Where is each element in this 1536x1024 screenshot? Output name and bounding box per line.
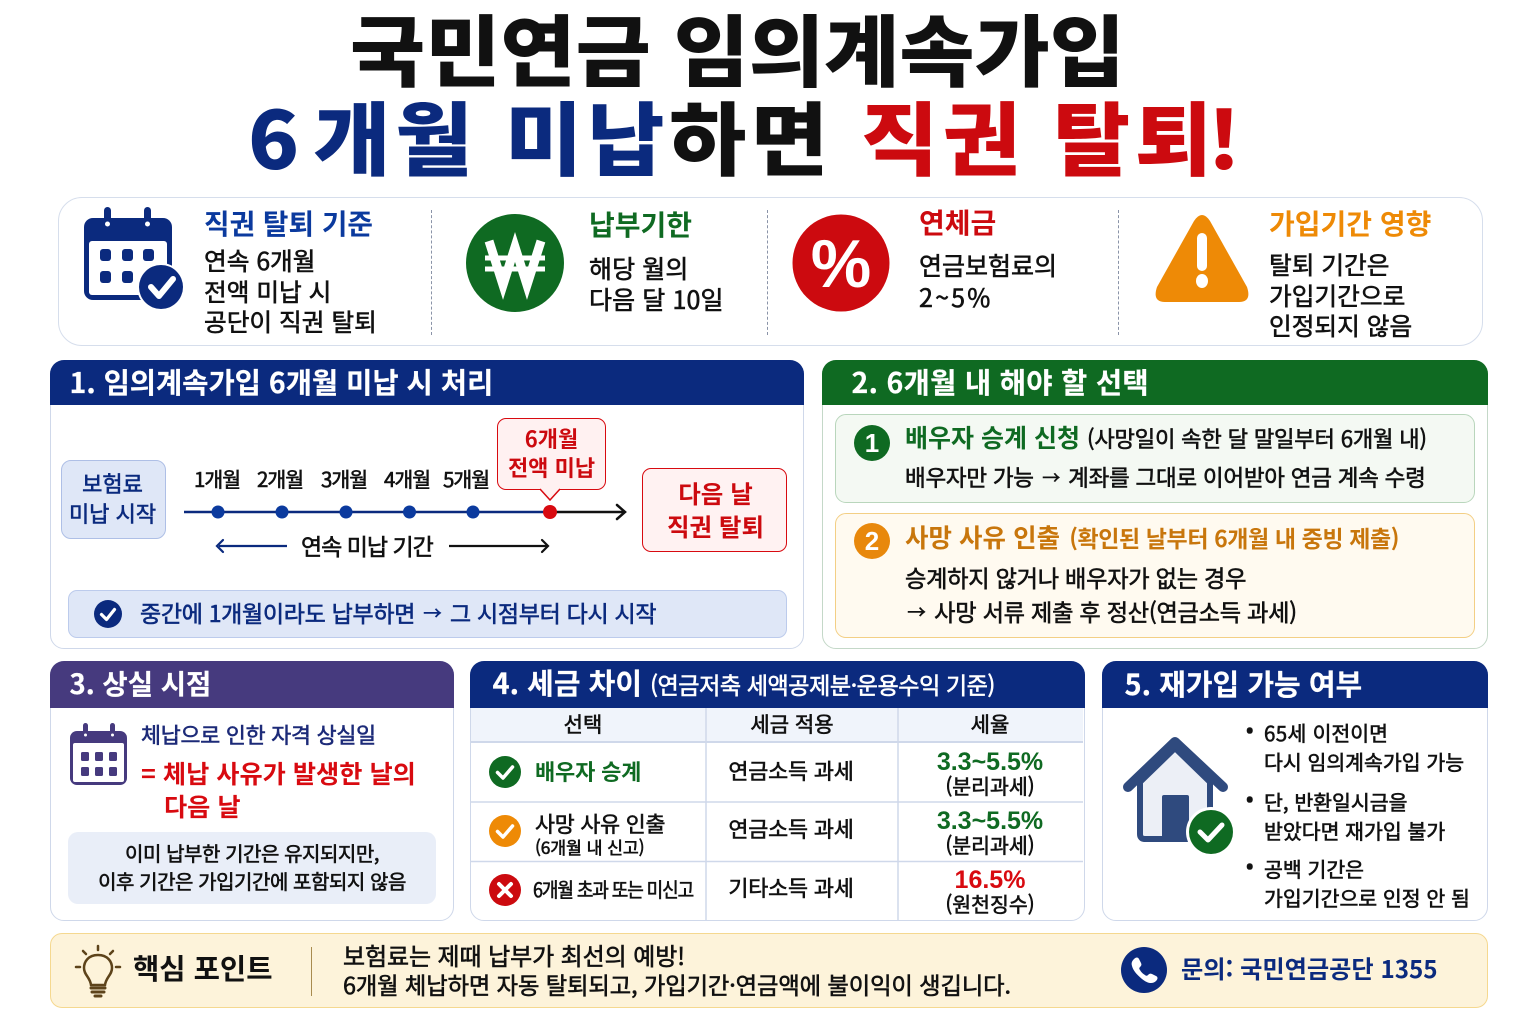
number badge — [854, 425, 890, 461]
heading: 직권 탈퇴 기준 — [204, 202, 373, 242]
text: late fee — [919, 202, 1057, 315]
contact text: 문의: 국민연금공단 1355 — [1181, 950, 1438, 985]
rate note: (분리과세) — [945, 770, 1035, 800]
icon: house check — [1123, 737, 1233, 854]
body: 공단이 직권 탈퇴 — [204, 303, 377, 339]
number badge — [854, 523, 890, 559]
icon: check — [94, 600, 122, 628]
heading: 연체금 — [919, 202, 996, 242]
bullet 3: 공백 기간은 — [1264, 853, 1364, 883]
loss date text: 체납으로 인한 자격 상실일 — [141, 719, 376, 750]
bullet 1: 다시 임의계속가입 가능 — [1264, 746, 1464, 776]
table grid — [471, 708, 1083, 920]
body: 해당 월의 — [589, 250, 689, 286]
bullet 3 — [1246, 854, 1481, 914]
table header row — [471, 708, 1083, 743]
note text: 이후 기간은 가입기간에 포함되지 않음 — [98, 866, 406, 894]
icon: phone — [1121, 947, 1167, 993]
header — [470, 660, 1085, 708]
body: 연속 6개월 — [204, 242, 315, 278]
note text — [98, 838, 406, 894]
note text: → — [423, 598, 442, 626]
note text: 이미 납부한 기간은 유지되지만, — [125, 838, 379, 866]
key message — [343, 941, 1023, 1005]
bullet 2: 받았다면 재가입 불가 — [1264, 814, 1445, 844]
callout text: 전액 미납 — [508, 451, 595, 483]
option title: 사망 사유 인출 (확인된 날부터 6개월 내 중빙 제출) — [905, 518, 1399, 555]
box text — [667, 476, 764, 544]
option text: 승계하지 않거나 배우자가 없는 경우 — [905, 560, 1246, 594]
panel 3: loss date — [50, 661, 454, 921]
column 2: 세금 적용 — [750, 709, 834, 739]
panel: key facts — [58, 197, 1483, 346]
divider 1 — [431, 210, 432, 335]
bullet 2: • — [1246, 781, 1253, 813]
bullet 1 — [1246, 718, 1481, 778]
option text: → — [907, 597, 926, 625]
column 3: 세율 — [971, 709, 1009, 739]
icon: orange check — [489, 815, 521, 847]
label: period: 연속 미납 기간 — [301, 528, 433, 562]
box text: 미납 시작 — [69, 497, 156, 529]
red statement — [141, 754, 416, 824]
panel: key point — [50, 933, 1488, 1008]
bullet 3: • — [1246, 848, 1253, 880]
choice note: (6개월 내 신고) — [535, 834, 644, 859]
tax: 연금소득 과세 — [728, 813, 854, 844]
icon: warning triangle — [1156, 215, 1248, 302]
box text: 다음 날 — [678, 476, 753, 511]
body: 전액 미납 시 — [204, 272, 331, 308]
header text: 1. 임의계속가입 6개월 미납 시 처리 — [70, 360, 493, 402]
body: 2~5% — [919, 279, 992, 315]
title — [248, 0, 1245, 193]
icon: light bulb — [75, 946, 121, 998]
option title: 배우자 승계 신청 (사망일이 속한 달 말일부터 6개월 내) — [905, 419, 1427, 455]
icon: red x — [489, 874, 521, 906]
line 1: 보험료는 제때 납부가 최선의 예방! — [343, 937, 685, 972]
rate note: (원천징수) — [945, 888, 1035, 918]
option 1 — [835, 414, 1475, 503]
divider — [311, 947, 312, 996]
callout text — [508, 422, 595, 483]
header text: 3. 상실 시점 — [70, 662, 211, 702]
icon: calendar — [70, 723, 127, 785]
option text: 배우자만 가능 계좌를 그대로 이어받아 연금 계속 수령 — [905, 461, 1426, 493]
body — [204, 242, 377, 339]
row: spouse succession — [489, 748, 1043, 800]
bullet 1: • — [1246, 712, 1253, 744]
header — [822, 360, 1488, 404]
number badge: 1 — [865, 428, 879, 458]
row: death withdrawal — [489, 807, 1043, 859]
icon: percent: % — [811, 226, 871, 302]
body — [589, 250, 724, 317]
rate: 3.3~5.5% — [937, 748, 1043, 776]
icon: won coin — [466, 214, 564, 312]
title line 2: 6개월 미납하면 직권 탈퇴! — [248, 77, 1245, 193]
panel 5: rejoining — [1102, 661, 1488, 921]
choice: 6개월 초과 또는 미신고 — [533, 874, 693, 903]
month labels: 3개월 — [321, 463, 367, 493]
icon: calendar check — [84, 207, 183, 309]
body: 다음 달 10일 — [589, 281, 724, 317]
option text: → — [1042, 464, 1060, 490]
red statement: 다음 날 — [164, 788, 241, 824]
choice: 배우자 승계 — [535, 755, 641, 787]
callout: six months — [497, 418, 606, 490]
option text: 사망 서류 제출 후 정산(연금소득 과세) — [934, 594, 1297, 628]
callout pointer — [540, 488, 560, 501]
month labels: 4개월 — [384, 463, 430, 493]
text: withdrawal criteria — [204, 202, 377, 339]
heading: 납부기한 — [589, 204, 692, 244]
panel 2: choices within six months — [822, 360, 1488, 649]
month labels: 2개월 — [257, 463, 303, 493]
bullet 2 — [1246, 787, 1481, 847]
callout text: 6개월 — [525, 422, 578, 454]
red statement: = 체납 사유가 발생한 날의 — [141, 754, 416, 790]
body: 연금보험료의 — [919, 247, 1057, 283]
row: late or not reported — [489, 866, 1035, 918]
body: 인정되지 않음 — [1269, 307, 1412, 343]
rate: 16.5% — [955, 866, 1025, 894]
line 2: 6개월 체납하면 자동 탈퇴되고, 가입기간·연금액에 불이익이 생깁니다. — [343, 967, 1011, 1001]
timeline — [184, 504, 627, 554]
body: 탈퇴 기간은 — [1269, 246, 1389, 282]
bullet 1: 65세 이전이면 — [1264, 717, 1388, 747]
month labels: 5개월 — [443, 463, 489, 493]
option text — [905, 560, 1297, 628]
bullet 2: 단, 반환일시금을 — [1264, 786, 1407, 816]
icon: green check — [489, 756, 521, 788]
box text: 보험료 — [82, 467, 143, 499]
panel 4: tax table — [470, 661, 1085, 921]
icon: percent — [792, 214, 890, 312]
box text: 직권 탈퇴 — [667, 509, 764, 544]
header — [50, 660, 454, 708]
note text: 중간에 1개월이라도 납부하면 그 시점부터 다시 시작 — [140, 595, 656, 629]
heading: 핵심 포인트 — [133, 947, 273, 988]
panel 1: non-payment handling — [50, 360, 804, 649]
option 2 — [835, 513, 1475, 638]
month labels — [194, 463, 489, 493]
note box — [68, 832, 436, 904]
box: start — [61, 460, 166, 539]
header text: 2. 6개월 내 해야 할 선택 — [852, 360, 1149, 402]
month labels: 1개월 — [194, 463, 240, 493]
rate: 3.3~5.5% — [937, 807, 1043, 835]
tax: 기타소득 과세 — [728, 872, 854, 903]
text: payment deadline — [589, 204, 724, 317]
header text: 5. 재가입 가능 여부 — [1124, 662, 1362, 704]
header text: 4. 세금 차이 (연금저축 세액공제분·운용수익 기준) — [492, 660, 995, 702]
choice: 사망 사유 인출 — [535, 808, 665, 839]
divider 3 — [1118, 210, 1119, 335]
body — [919, 247, 1057, 315]
number badge: 2 — [865, 526, 879, 556]
bullet 3: 가입기간으로 인정 안 됨 — [1264, 882, 1470, 912]
tax: 연금소득 과세 — [728, 755, 854, 786]
heading: 가입기간 영향 — [1269, 203, 1431, 243]
body: 가입기간으로 — [1269, 276, 1405, 312]
body — [1269, 246, 1412, 343]
header — [50, 360, 804, 404]
column 1: 선택 — [564, 709, 602, 739]
text: membership impact — [1269, 203, 1431, 343]
box: withdrawal — [642, 468, 787, 552]
rate note: (분리과세) — [945, 829, 1035, 859]
divider 2 — [767, 210, 768, 335]
header — [1102, 660, 1488, 708]
box text — [69, 467, 156, 529]
bullet list — [1243, 714, 1483, 914]
note bar — [68, 590, 787, 638]
